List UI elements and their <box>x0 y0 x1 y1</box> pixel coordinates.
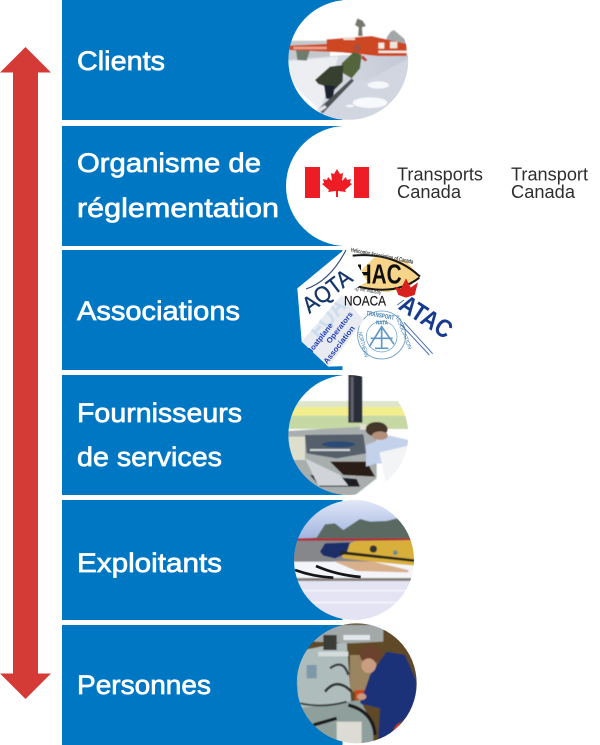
photo: aircraft maintenance technician <box>295 622 420 745</box>
label: Exploitants: Exploitants <box>77 548 222 578</box>
panel: Exploitants <box>62 498 415 622</box>
photo: floatplane on water <box>293 498 415 622</box>
label: Organisme de réglementation: Organisme de <box>77 148 261 178</box>
label: Associations: Associations <box>77 296 240 326</box>
logo: Floatplane Operators Association: Operators <box>324 310 355 345</box>
panel: Organisme de réglementation <box>62 126 600 246</box>
logo: NOACA: NOACA <box>344 293 387 309</box>
photo: skiers and helicopter <box>287 0 410 120</box>
panel: Clients <box>62 0 410 120</box>
panel: Fournisseurs de services <box>62 373 410 497</box>
logo: HAC: ging the Industry <box>350 285 382 296</box>
label: Fournisseurs de services: de services <box>77 442 222 472</box>
logo: NATA seal: ASSOCIATION <box>393 314 412 350</box>
double-headed vertical arrow <box>0 47 51 699</box>
label: Personnes: Personnes <box>77 670 211 700</box>
panel: Personnes <box>62 622 420 745</box>
logo: NATA seal: NORTHERN <box>356 331 369 358</box>
white backing <box>297 248 452 367</box>
label: Fournisseurs de services: Fournisseurs <box>77 398 242 428</box>
logo: NATA seal: TRANSPORT <box>366 310 395 322</box>
logo: HAC: Helicopter Association of Canada <box>350 248 414 266</box>
logo: Floatplane Operators Association: Association <box>321 324 357 366</box>
white rounded cut-out <box>286 126 600 246</box>
text: Transports Canada: Canada <box>397 182 462 202</box>
logo: HAC: HAC <box>357 258 402 289</box>
text: Transport Canada: Canada <box>511 182 576 202</box>
logo: AQTA: AQTA <box>297 263 358 318</box>
logo: Floatplane Operators Association: FOA <box>301 291 352 344</box>
logos: aviation associations <box>297 248 457 367</box>
logo: NATA seal <box>356 310 412 359</box>
text: Transport Canada: Transport <box>511 164 588 184</box>
icon: Canadian flag <box>305 167 369 198</box>
panel: Associations <box>62 248 457 370</box>
logo: Floatplane Operators Association <box>301 291 364 367</box>
logo: ATAC: ATAC <box>394 290 457 345</box>
logo: NATA seal: NATA <box>376 320 388 326</box>
text: Transports Canada: Transports <box>397 164 483 184</box>
label: Clients: Clients <box>77 46 165 76</box>
logo: HAC <box>350 248 420 296</box>
photo: air traffic service operator <box>287 373 410 497</box>
label: Organisme de réglementation: réglementation <box>77 193 279 223</box>
logo: Floatplane Operators Association: loatplane <box>307 321 335 354</box>
logo: Transports Canada <box>305 164 588 202</box>
